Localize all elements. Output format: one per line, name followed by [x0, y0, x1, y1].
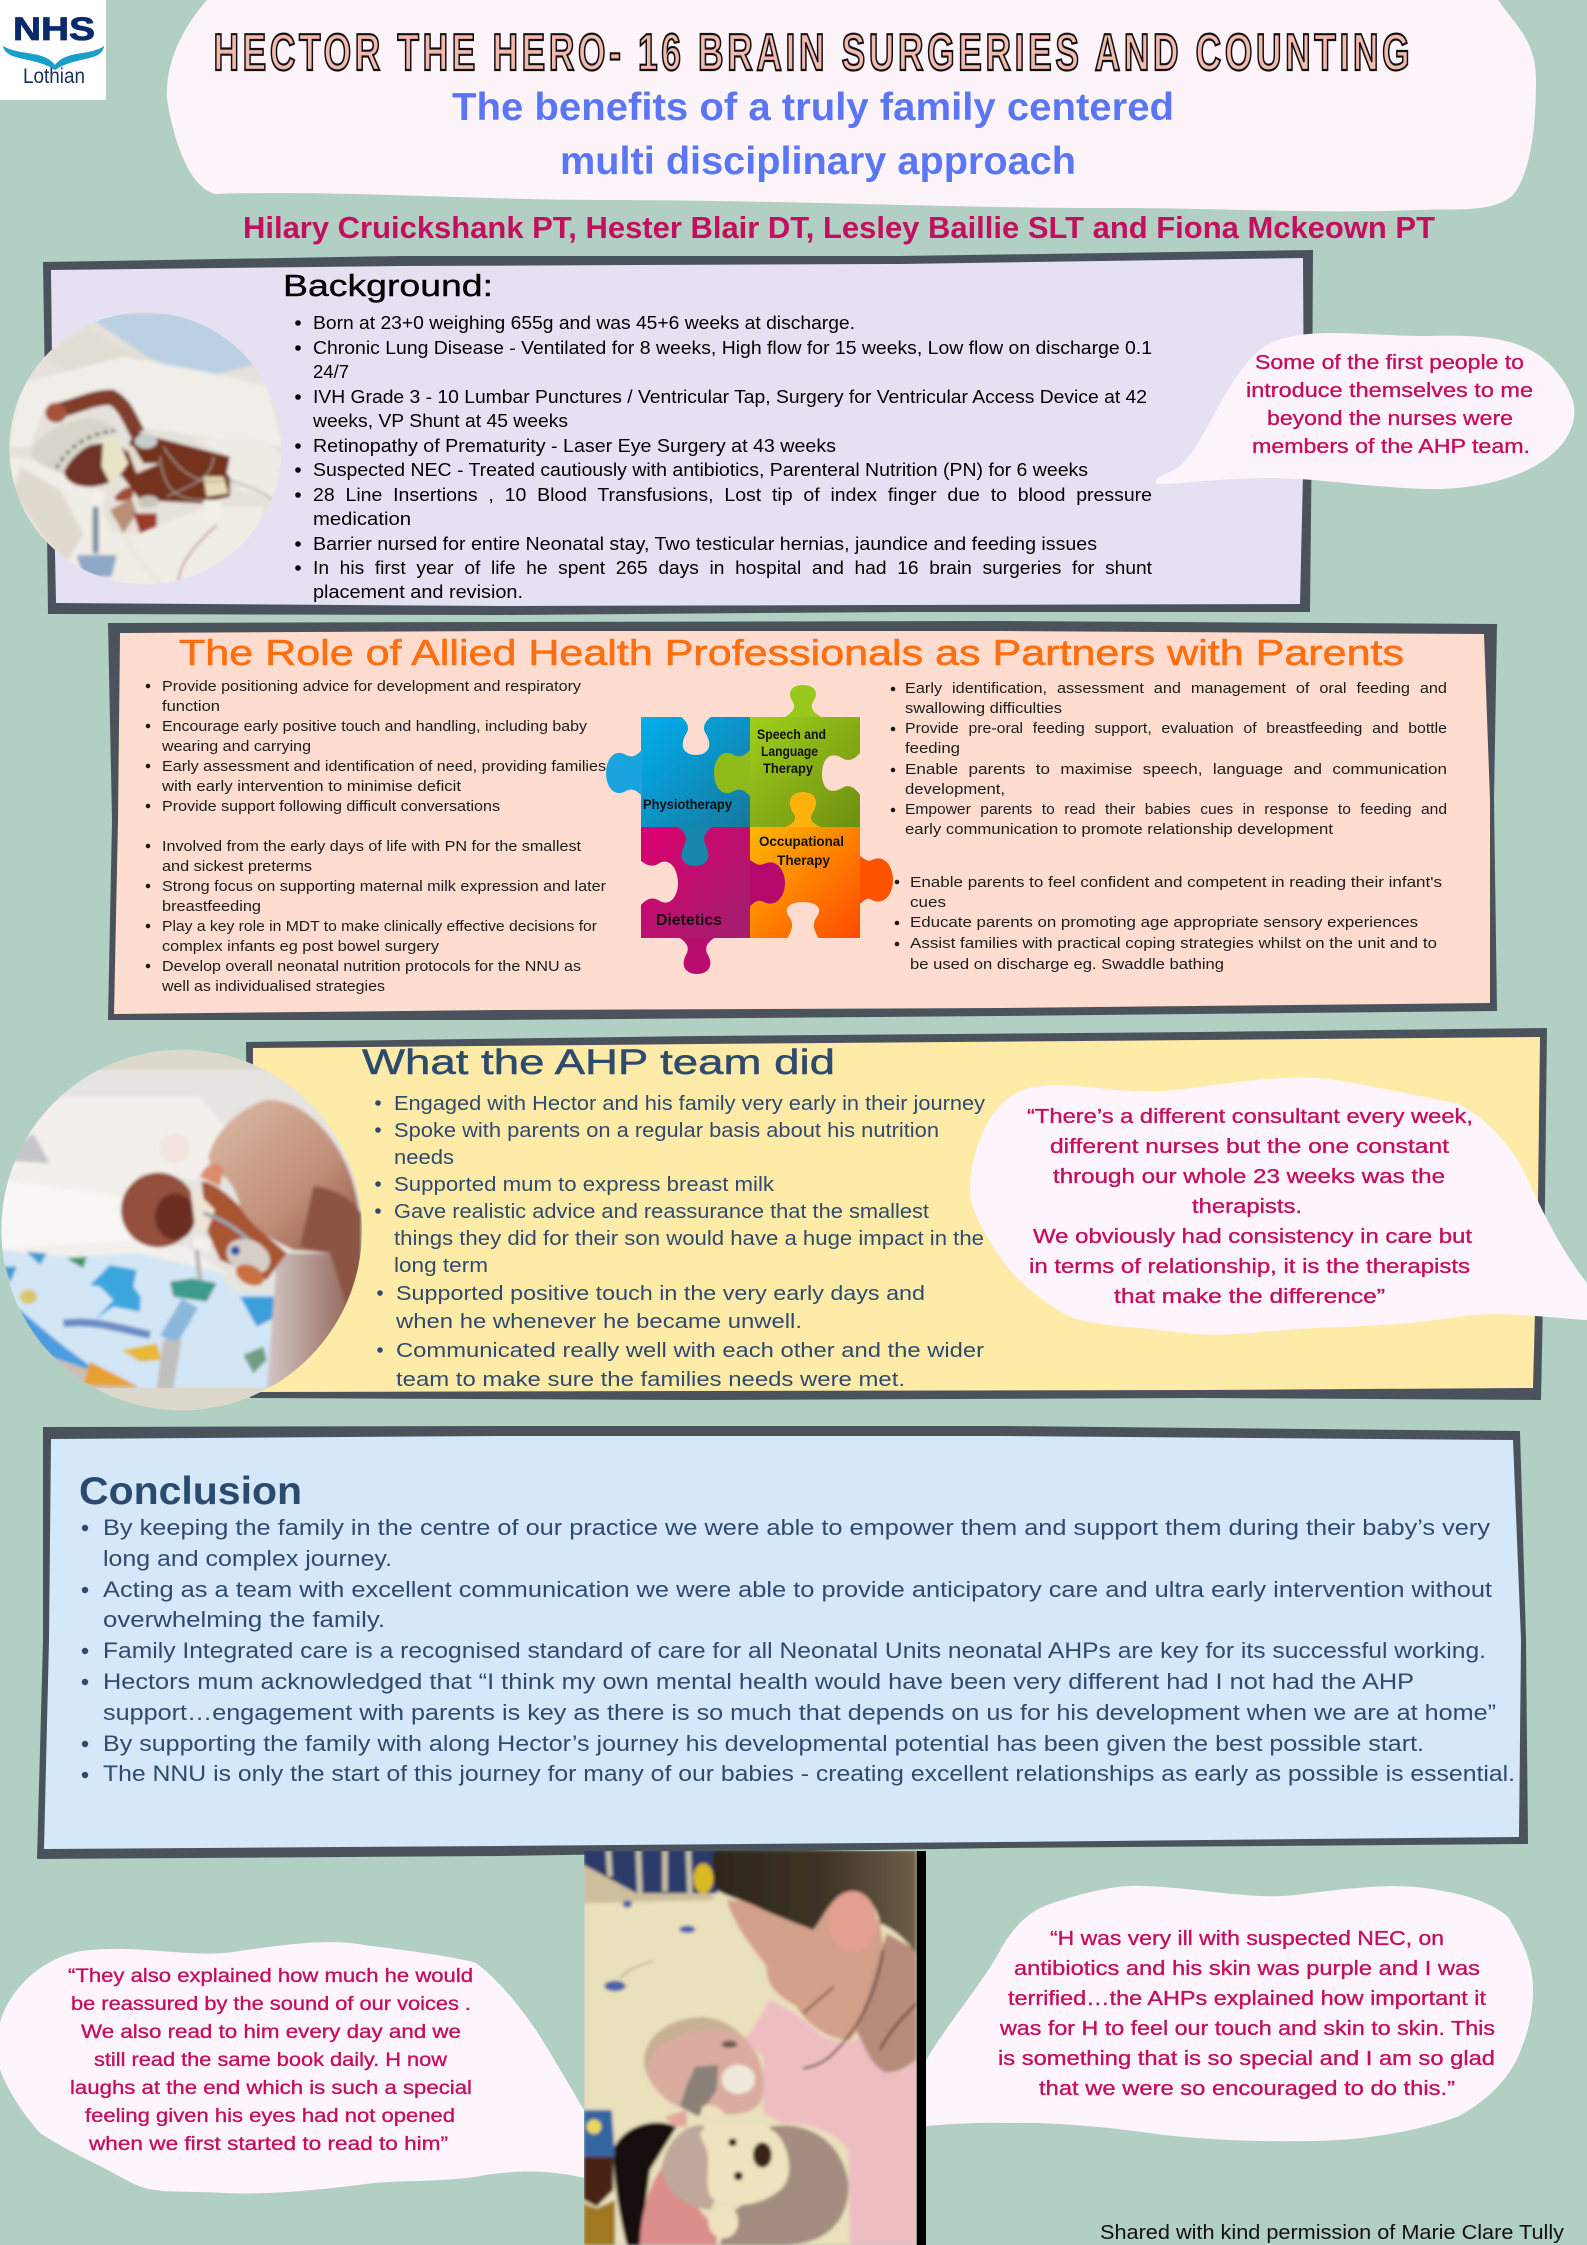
quote bubble: therapists make the difference: [970, 1077, 1587, 1335]
list: physiotherapy and dietetics: Strong focus on supporting maternal milk expression and later: [162, 878, 606, 895]
main title: HECTOR THE HERO- 16 BRAIN SURGERIES AND COUNTING: [214, 24, 1410, 82]
quote text: members of the AHP team.: [1252, 436, 1530, 458]
label: occupational therapy: Therapy: [777, 853, 830, 868]
list: speech and language therapy: Enable parents to maximise speech, language and communication: [905, 761, 1447, 778]
list: occupational therapy: Educate parents on promoting age appropriate sensory experiences: [910, 914, 1418, 931]
quote text: that we were so encouraged to do this.”: [1039, 2077, 1455, 2100]
quote text: different nurses but the one constant: [1050, 1136, 1450, 1158]
NHS Lothian logo: [0, 0, 106, 100]
list: conclusions: By keeping the family in the centre of our practice we were able to empower them and support them during their baby’s very: [103, 1515, 1491, 1540]
subtitle: [452, 86, 1174, 183]
quote text: still read the same book daily. H now: [94, 2049, 448, 2071]
quote text: be reassured by the sound of our voices .: [71, 1993, 471, 2015]
list: physiotherapy and dietetics: complex infants eg post bowel surgery: [162, 938, 440, 955]
list: background facts: IVH Grade 3 - 10 Lumbar Punctures / Ventricular Tap, Surgery for Ventricular Access Device at 42: [313, 387, 1147, 407]
list: physiotherapy and dietetics: Encourage early positive touch and handling, including baby: [162, 718, 588, 735]
quote text: through our whole 23 weeks was the: [1053, 1166, 1445, 1188]
title banner: [167, 0, 1536, 211]
quote text: [1027, 1106, 1473, 1308]
list: speech and language therapy: Empower parents to read their babies cues in response to feeding and: [905, 801, 1447, 818]
list: conclusions: support…engagement with parents is key as there is so much that depends on us for his development when we are at home”: [103, 1700, 1496, 1725]
label: speech and language therapy: Speech and: [757, 727, 826, 742]
list: background facts: placement and revision.: [313, 582, 523, 602]
list: background facts: Suspected NEC - Treated cautiously with antibiotics, Parenteral Nutrition (PN) for 6 weeks: [313, 460, 1088, 480]
list: speech and language therapy: [891, 680, 1447, 838]
list: background facts: 28 Line Insertions , 10 Blood Transfusions, Lost tip of index finger due to blood pressure: [313, 485, 1152, 505]
list: physiotherapy and dietetics: wearing and carrying: [161, 738, 311, 755]
list: background facts: medication: [313, 509, 411, 529]
quote text: “There’s a different consultant every week,: [1027, 1106, 1473, 1128]
panel: background: [43, 250, 1313, 615]
label: speech and language therapy: Language: [761, 744, 818, 759]
list: conclusions: [82, 1515, 1515, 1786]
list: actions: when he whenever he became unwell.: [395, 1311, 802, 1333]
list: physiotherapy and dietetics: Provide support following difficult conversations: [162, 798, 500, 815]
list: occupational therapy: cues: [910, 894, 946, 911]
heading: conclusion: Conclusion: [79, 1470, 302, 1513]
list: background facts: 24/7: [313, 362, 349, 382]
quote text: [1246, 352, 1533, 458]
quote bubble: reading to him: [0, 1942, 584, 2193]
heading: role of AHPs: The Role of Allied Health Professionals as Partners with Parents: [179, 632, 1404, 673]
icon: jigsaw puzzle of four disciplines: [606, 685, 893, 974]
list: actions: Engaged with Hector and his family very early in their journey: [394, 1093, 985, 1115]
permission credit: Shared with kind permission of Marie Clare Tully: [1100, 2222, 1564, 2244]
quote text: when we first started to read to him”: [88, 2133, 448, 2155]
list: speech and language therapy: development,: [905, 781, 1005, 798]
quote text: is something that is so special and I am so glad: [998, 2047, 1495, 2070]
list: physiotherapy and dietetics: well as individualised strategies: [161, 978, 385, 995]
quote bubble: touch and skin to skin: [926, 1886, 1533, 2141]
label: dietetics: Dietetics: [656, 912, 722, 929]
quote text: in terms of relationship, it is the therapists: [1029, 1256, 1470, 1278]
list: physiotherapy and dietetics: Play a key role in MDT to make clinically effective decisions for: [162, 918, 597, 935]
list: occupational therapy: Assist families with practical coping strategies whilst on the unit and to: [910, 935, 1437, 952]
quote text: [68, 1965, 473, 2155]
list: actions: Communicated really well with each other and the wider: [396, 1340, 984, 1362]
list: actions: Gave realistic advice and reassurance that the smallest: [394, 1201, 929, 1223]
quote text: antibiotics and his skin was purple and I was: [1014, 1957, 1480, 1980]
label: occupational therapy: [759, 834, 844, 868]
list: background facts: Retinopathy of Prematurity - Laser Eye Surgery at 43 weeks: [313, 436, 836, 456]
list: actions: things they did for their son would have a huge impact in the: [394, 1228, 984, 1250]
quote text: [998, 1927, 1495, 2100]
list: speech and language therapy: early communication to promote relationship development: [905, 821, 1334, 838]
list: conclusions: Acting as a team with excellent communication we were able to provide anticipatory care and ultra early intervention without: [103, 1577, 1493, 1602]
list: actions: Supported positive touch in the very early days and: [396, 1283, 925, 1305]
list: speech and language therapy: feeding: [905, 740, 960, 757]
list: conclusions: By supporting the family with along Hector’s journey his developmental potential has been given the best possible start.: [103, 1731, 1424, 1756]
photo: premature baby in white bedding: [9, 312, 282, 584]
list: speech and language therapy: Early identification, assessment and management of oral feeding and: [905, 680, 1447, 697]
list: actions: team to make sure the families needs were met.: [396, 1369, 905, 1391]
list: speech and language therapy: swallowing difficulties: [905, 700, 1062, 717]
list: actions: needs: [394, 1147, 454, 1169]
list: occupational therapy: Enable parents to feel confident and competent in reading their infant's: [910, 874, 1442, 891]
list: conclusions: The NNU is only the start of this journey for many of our babies - creating excellent relationships as early as possible is essential.: [103, 1761, 1515, 1786]
list: background facts: In his first year of life he spent 265 days in hospital and had 16 brain surgeries for shunt: [313, 558, 1152, 578]
quote text: “H was very ill with suspected NEC, on: [1050, 1927, 1444, 1950]
subtitle: The benefits of a truly family centered: [452, 86, 1174, 129]
list: actions: Spoke with parents on a regular basis about his nutrition: [394, 1120, 939, 1142]
list: physiotherapy and dietetics: Provide positioning advice for development and respiratory: [162, 678, 582, 695]
quote text: laughs at the end which is such a special: [70, 2077, 472, 2099]
list: actions: [375, 1093, 985, 1391]
list: conclusions: overwhelming the family.: [103, 1607, 385, 1632]
list: background facts: Barrier nursed for entire Neonatal stay, Two testicular hernias, jaundice and feeding issues: [313, 534, 1097, 554]
list: occupational therapy: be used on discharge eg. Swaddle bathing: [910, 956, 1224, 973]
subtitle: multi disciplinary approach: [560, 140, 1076, 183]
list: physiotherapy and dietetics: function: [162, 698, 220, 715]
quote text: beyond the nurses were: [1267, 408, 1513, 430]
quote text: Some of the first people to: [1255, 352, 1524, 374]
list: physiotherapy and dietetics: Involved from the early days of life with PN for the smallest: [162, 838, 582, 855]
quote text: We obviously had consistency in care but: [1033, 1226, 1473, 1248]
list: actions: long term: [394, 1255, 488, 1277]
label: speech and language therapy: [757, 727, 826, 776]
NHS Lothian logo: NHS: [13, 11, 95, 47]
quote text: was for H to feel our touch and skin to skin. This: [999, 2017, 1495, 2040]
quote text: that make the difference”: [1114, 1286, 1385, 1308]
authors: Hilary Cruickshank PT, Hester Blair DT, Lesley Baillie SLT and Fiona Mckeown PT: [243, 210, 1435, 245]
list: physiotherapy and dietetics: breastfeeding: [162, 898, 261, 915]
panel: role of allied health professionals: [108, 621, 1497, 1020]
list: occupational therapy: [895, 874, 1442, 973]
heading: what the AHP team did: What the AHP team did: [362, 1043, 835, 1082]
quote text: “They also explained how much he would: [68, 1965, 473, 1987]
list: conclusions: Family Integrated care is a recognised standard of care for all Neonatal Units neonatal AHPs are key for its successful working.: [103, 1638, 1486, 1663]
photo: mother with baby and soft toy: [584, 1850, 926, 2245]
speech bubble: first people: [1156, 333, 1574, 489]
NHS Lothian logo: Lothian: [23, 65, 85, 88]
panel: conclusion: [37, 1426, 1528, 1859]
list: physiotherapy and dietetics: and sickest preterms: [162, 858, 312, 875]
list: conclusions: Hectors mum acknowledged that “I think my own mental health would have been very different had I not had the AHP: [103, 1669, 1414, 1694]
list: background facts: weeks, VP Shunt at 45 weeks: [312, 411, 568, 431]
panel: what the AHP team did: [246, 1028, 1547, 1400]
list: conclusions: long and complex journey.: [103, 1546, 392, 1571]
label: physiotherapy: Physiotherapy: [643, 797, 732, 812]
label: occupational therapy: Occupational: [759, 834, 844, 849]
heading: Background: Background:: [283, 268, 493, 303]
list: background facts: Born at 23+0 weighing 655g and was 45+6 weeks at discharge.: [313, 313, 855, 333]
list: background facts: Chronic Lung Disease - Ventilated for 8 weeks, High flow for 15 weeks, Low flow on discharge 0.1: [313, 338, 1152, 358]
list: physiotherapy and dietetics: with early intervention to minimise deficit: [161, 778, 462, 795]
quote text: terrified…the AHPs explained how important it: [1008, 1987, 1486, 2010]
list: physiotherapy and dietetics: [146, 678, 606, 995]
quote text: introduce themselves to me: [1246, 380, 1533, 402]
label: speech and language therapy: Therapy: [763, 761, 813, 776]
quote text: feeling given his eyes had not opened: [85, 2105, 455, 2127]
photo: parent's hand holding baby's hand: [0, 1040, 370, 1420]
quote text: therapists.: [1192, 1196, 1302, 1218]
list: speech and language therapy: Provide pre-oral feeding support, evaluation of breastfeeding and bottle: [905, 720, 1447, 737]
list: background facts: [295, 313, 1152, 602]
list: physiotherapy and dietetics: Develop overall neonatal nutrition protocols for the NNU as: [162, 958, 581, 975]
list: physiotherapy and dietetics: Early assessment and identification of need, providing families: [162, 758, 606, 775]
quote text: We also read to him every day and we: [81, 2021, 461, 2043]
list: actions: Supported mum to express breast milk: [394, 1174, 775, 1196]
